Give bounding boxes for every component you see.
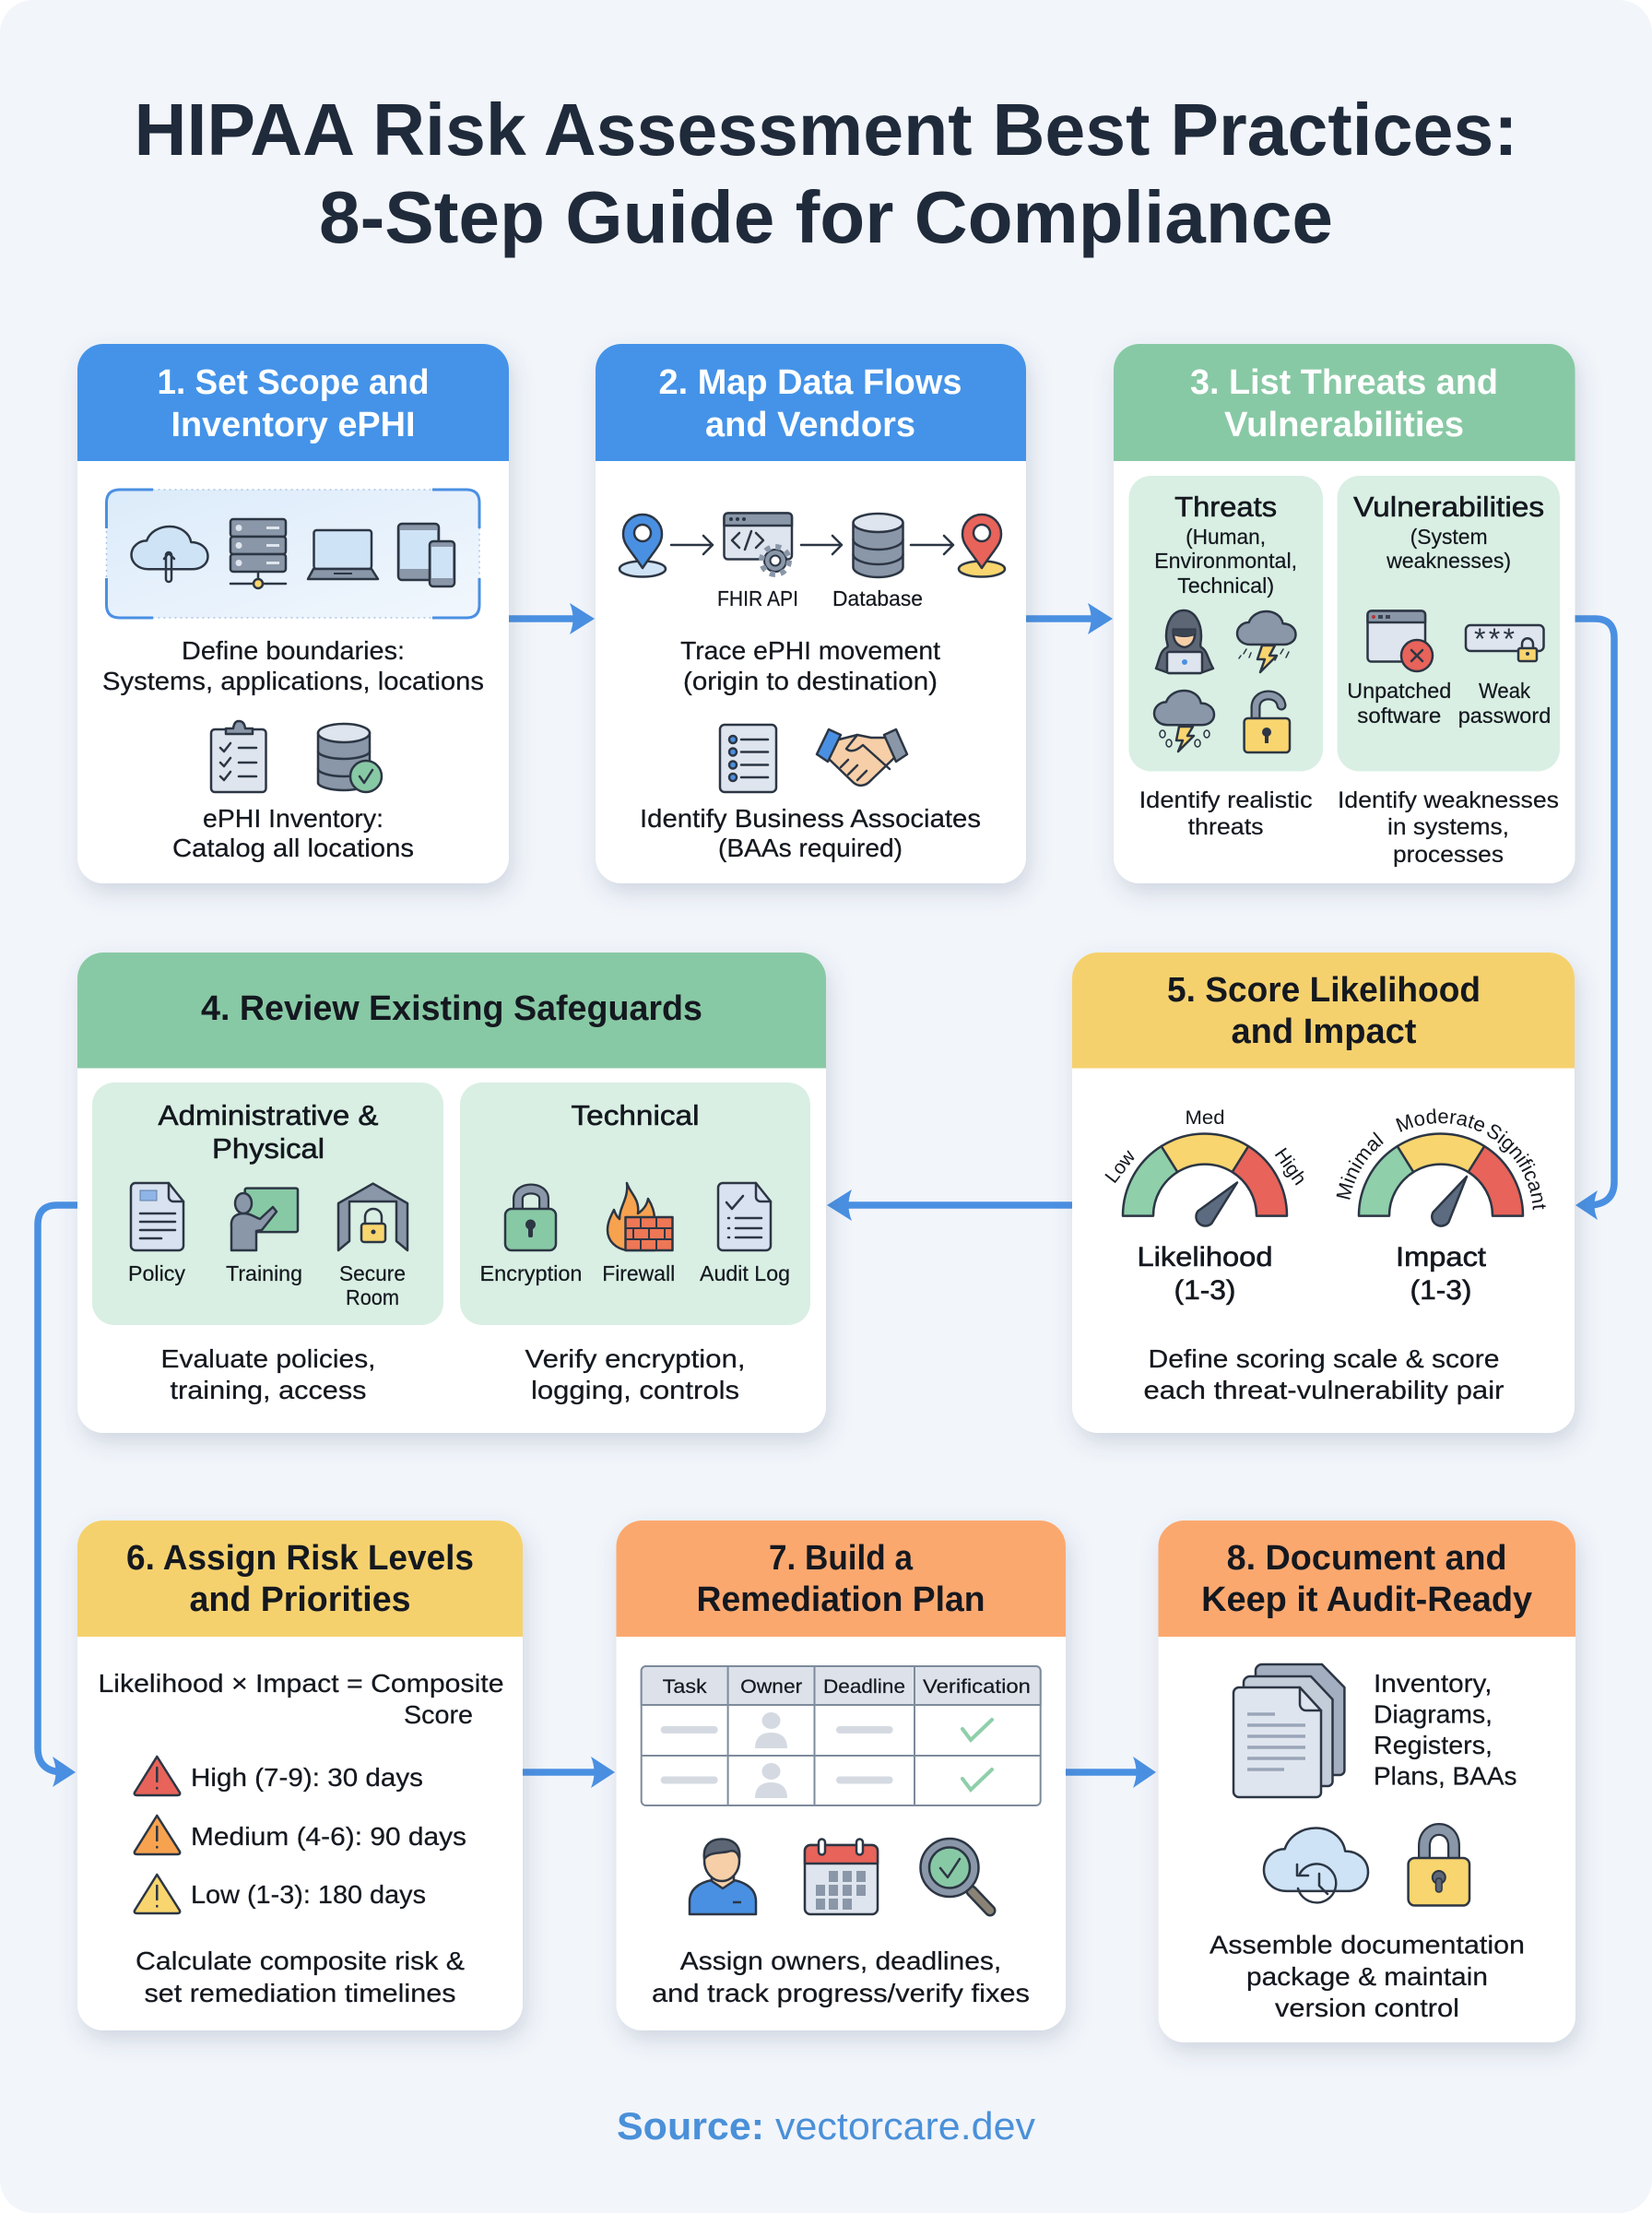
data flow diagram [620, 513, 1005, 610]
arrow: step 7 to step 8 [1066, 1757, 1156, 1788]
text: trace ePHI: Trace ePHI movement [680, 636, 940, 665]
arrow: step 6 to step 7 [523, 1757, 615, 1788]
text: document list: Plans, BAAs [1374, 1761, 1517, 1791]
sub-panel: vulnerabilities: password [1458, 704, 1551, 728]
step 6 header [77, 1521, 523, 1637]
panel: step 4 [77, 953, 826, 1433]
text: impact label: Impact [1396, 1242, 1487, 1272]
title [135, 89, 1517, 258]
icon: unpatched window [1368, 610, 1433, 671]
sub-panel: vulnerabilities: software [1357, 704, 1441, 728]
icon: audit log [718, 1183, 771, 1250]
sub-panel: threats [1128, 476, 1323, 771]
arrow: step 4 to step 6 [38, 1205, 77, 1787]
sub-panel: administrative and physical: Secure [339, 1261, 406, 1285]
icon: document stack [1233, 1664, 1344, 1797]
step 7 header: Remediation Plan [697, 1580, 985, 1619]
icon: magnifier check [920, 1839, 990, 1911]
icon: handshake [817, 729, 907, 786]
text: formula [98, 1669, 503, 1729]
sub-panel: threats: Environmontal, [1154, 549, 1297, 573]
step 1 header: 1. Set Scope and [157, 363, 430, 402]
text: define boundaries [102, 636, 484, 695]
icon: vendor list [720, 725, 776, 792]
sub-panel: vulnerabilities: Vulnerabilities [1353, 491, 1544, 523]
text: calculate composite: Calculate composite risk & [136, 1947, 465, 1975]
text: evaluate policies [160, 1344, 376, 1404]
icon: high risk warning [135, 1757, 180, 1795]
text: identify business associates [640, 804, 981, 862]
panel: step 6 [77, 1521, 523, 2030]
sub-panel: threats: Technical) [1177, 574, 1274, 598]
sub-panel: vulnerabilities: (System [1410, 525, 1488, 549]
remediation table: Verification [923, 1676, 1031, 1698]
text: assemble documentation: Assemble documentation [1210, 1931, 1525, 1959]
sub-panel: administrative and physical: Administrative & [159, 1099, 379, 1131]
text: identify threats [1139, 787, 1313, 840]
sub-panel: threats: Threats [1174, 491, 1277, 523]
text: define scoring [1143, 1344, 1504, 1404]
sub-panel: administrative and physical: Room [346, 1285, 399, 1309]
step 8 header: 8. Document and [1227, 1539, 1507, 1578]
step 1 header: Inventory ePHI [171, 406, 415, 444]
chart: likelihood gauge: High [1270, 1144, 1310, 1189]
text: impact label [1396, 1242, 1487, 1306]
text: evaluate policies: Evaluate policies, [160, 1344, 376, 1373]
remediation table: Deadline [823, 1676, 905, 1698]
icon: tablet and phone [398, 524, 454, 586]
step 6 header: and Priorities [190, 1580, 411, 1619]
remediation table: Task [663, 1676, 707, 1698]
icon: storm with rain [1154, 691, 1214, 751]
sub-panel: vulnerabilities [1338, 476, 1560, 771]
icon: weak password: *** [1474, 622, 1515, 656]
icon: laptop [308, 530, 378, 579]
icon: medium risk warning [135, 1816, 180, 1854]
step 6 header: 6. Assign Risk Levels [126, 1539, 474, 1578]
chart: likelihood gauge: Low [1101, 1145, 1140, 1188]
text: define scoring: each threat-vulnerability pair [1143, 1376, 1504, 1404]
text: define scoring: Define scoring scale & score [1149, 1344, 1499, 1373]
sub-panel: vulnerabilities: Unpatched [1347, 679, 1451, 703]
icon: cloud version history [1264, 1828, 1368, 1909]
text: trace ePHI: (origin to destination) [683, 667, 938, 695]
icon: owner person [690, 1839, 756, 1914]
panel: step 5 [1069, 953, 1586, 1450]
chart: impact gauge: Significant [1487, 1125, 1546, 1210]
chart: impact gauge: Minimal [1337, 1131, 1384, 1200]
text: verify encryption: Verify encryption, [525, 1344, 745, 1373]
icon: FHIR API window [725, 513, 792, 574]
text: trace ePHI [680, 636, 940, 695]
text: formula: Likelihood × Impact = Composite [98, 1669, 503, 1698]
text: document list: Diagrams, [1374, 1700, 1493, 1728]
panel: step 3 [1114, 344, 1575, 883]
text: verify encryption [525, 1344, 745, 1404]
panel: step 7 [616, 1521, 1066, 2030]
sub-panel: technical: Technical [572, 1099, 699, 1131]
step 1 header [77, 344, 509, 461]
text: identify weaknesses: in systems, [1387, 814, 1509, 840]
icon: secure room [338, 1184, 407, 1250]
chart: likelihood gauge [1101, 1107, 1310, 1225]
icon: checklist clipboard [211, 721, 266, 792]
step 2 header [596, 344, 1026, 461]
sub-panel: threats: (Human, [1186, 525, 1266, 549]
step 8 header: Keep it Audit-Ready [1201, 1580, 1532, 1619]
sub-panel: vulnerabilities: weaknesses) [1386, 549, 1511, 573]
text: identify threats: Identify realistic [1139, 787, 1313, 813]
arrow: step 3 to step 5 [1575, 619, 1614, 1220]
sub-panel: technical: Audit Log [700, 1261, 790, 1285]
step 3 header: 3. List Threats and [1190, 363, 1498, 402]
text: ePHI inventory: Catalog all locations [172, 834, 414, 862]
panel: step 2 [596, 344, 1026, 883]
step 5 header: and Impact [1232, 1012, 1417, 1051]
icon: policy document [131, 1183, 183, 1250]
text: likelihood label [1138, 1242, 1272, 1306]
text: calculate composite [136, 1947, 465, 2007]
icon: cloud upload [131, 527, 208, 582]
text: document list [1374, 1669, 1517, 1791]
icon: padlock [1409, 1829, 1469, 1905]
step 2 header: and Vendors [705, 406, 915, 444]
sub-panel: administrative and physical: Physical [212, 1132, 324, 1165]
text: formula: Score [404, 1700, 473, 1729]
icon: weak password [1466, 622, 1543, 661]
text: likelihood label: (1-3) [1174, 1275, 1235, 1306]
source credit: Source: vectorcare.dev [617, 2104, 1035, 2148]
text: evaluate policies: training, access [170, 1376, 367, 1404]
remediation table [642, 1666, 1041, 1805]
text: low risk: Low (1-3): 180 days [191, 1880, 426, 1909]
text: document list: Inventory, [1374, 1669, 1492, 1698]
remediation table: Owner [740, 1676, 802, 1698]
text: define boundaries: Define boundaries: [182, 636, 405, 665]
text: identify weaknesses: processes [1393, 842, 1504, 868]
step 5 header [1072, 953, 1575, 1068]
icon: calendar [805, 1839, 878, 1914]
text: ePHI inventory: ePHI Inventory: [203, 804, 384, 833]
text: assemble documentation: package & maintain [1246, 1962, 1488, 1991]
data flow diagram: FHIR API [717, 586, 798, 610]
chart: likelihood gauge: Med [1186, 1107, 1224, 1129]
text: assemble documentation [1210, 1931, 1525, 2022]
text: high risk: High (7-9): 30 days [191, 1763, 423, 1792]
icon: server rack [230, 519, 286, 588]
icon: database [854, 514, 903, 577]
step 7 header: 7. Build a [769, 1539, 914, 1578]
arrow: step 2 to step 3 [1026, 603, 1113, 634]
text: define boundaries: Systems, applications, locations [102, 667, 484, 695]
title: 8-Step Guide for Compliance [319, 176, 1333, 258]
text: assign owners: and track progress/verify fixes [652, 1979, 1030, 2007]
sub-panel: technical: Firewall [602, 1261, 675, 1285]
arrow: step 5 to step 4 [827, 1189, 1072, 1221]
icon: origin pin [620, 515, 666, 577]
text: assemble documentation: version control [1275, 1994, 1459, 2022]
icon: destination pin [959, 515, 1005, 577]
text: identify business associates: (BAAs required) [718, 834, 903, 862]
sub-panel: administrative and physical: Training [226, 1261, 302, 1285]
boundary box with system icons [107, 490, 479, 618]
text: assign owners: Assign owners, deadlines, [680, 1947, 1001, 1975]
text: identify threats: threats [1188, 814, 1264, 840]
chart: impact gauge: Moderate [1396, 1108, 1484, 1132]
step 7 header [616, 1521, 1066, 1637]
text: impact label: (1-3) [1410, 1275, 1471, 1306]
sub-panel: administrative and physical [92, 1083, 443, 1325]
step 8 header [1158, 1521, 1575, 1637]
text: assign owners [652, 1947, 1030, 2007]
step 3 header: Vulnerabilities [1224, 406, 1464, 444]
text: calculate composite: set remediation timelines [144, 1979, 455, 2007]
text: document list: Registers, [1374, 1731, 1493, 1759]
text: likelihood label: Likelihood [1138, 1242, 1272, 1272]
panel: step 8 [1158, 1521, 1575, 2042]
icon: hacker [1156, 610, 1213, 673]
step 5 header: 5. Score Likelihood [1167, 971, 1481, 1010]
text: identify business associates: Identify Business Associates [640, 804, 981, 833]
icon: thunderstorm [1237, 611, 1296, 672]
text: identify weaknesses: Identify weaknesses [1338, 787, 1559, 813]
icon: verified database [318, 724, 382, 792]
chart: impact gauge [1337, 1108, 1546, 1227]
data flow diagram: Database [832, 586, 923, 610]
icon: firewall [608, 1183, 673, 1250]
title: HIPAA Risk Assessment Best Practices: [135, 89, 1517, 171]
sub-panel: technical: Encryption [479, 1261, 583, 1285]
text: verify encryption: logging, controls [531, 1376, 739, 1404]
text: identify weaknesses [1338, 787, 1559, 868]
step 4 header: 4. Review Existing Safeguards [201, 989, 702, 1028]
text: medium risk: Medium (4-6): 90 days [191, 1822, 466, 1851]
text: ePHI inventory [172, 804, 414, 862]
step 4 header [77, 953, 826, 1068]
arrow: step 1 to step 2 [509, 603, 595, 634]
panel: step 1 [77, 344, 509, 883]
step 3 header [1114, 344, 1575, 461]
icon: open padlock [1245, 695, 1290, 752]
icon: training [231, 1189, 298, 1250]
icon: encryption lock [505, 1189, 556, 1250]
step 2 header: 2. Map Data Flows [658, 363, 962, 402]
icon: low risk warning [135, 1875, 180, 1913]
sub-panel: technical [460, 1083, 810, 1325]
sub-panel: vulnerabilities: Weak [1479, 679, 1530, 703]
sub-panel: administrative and physical: Policy [128, 1261, 185, 1285]
